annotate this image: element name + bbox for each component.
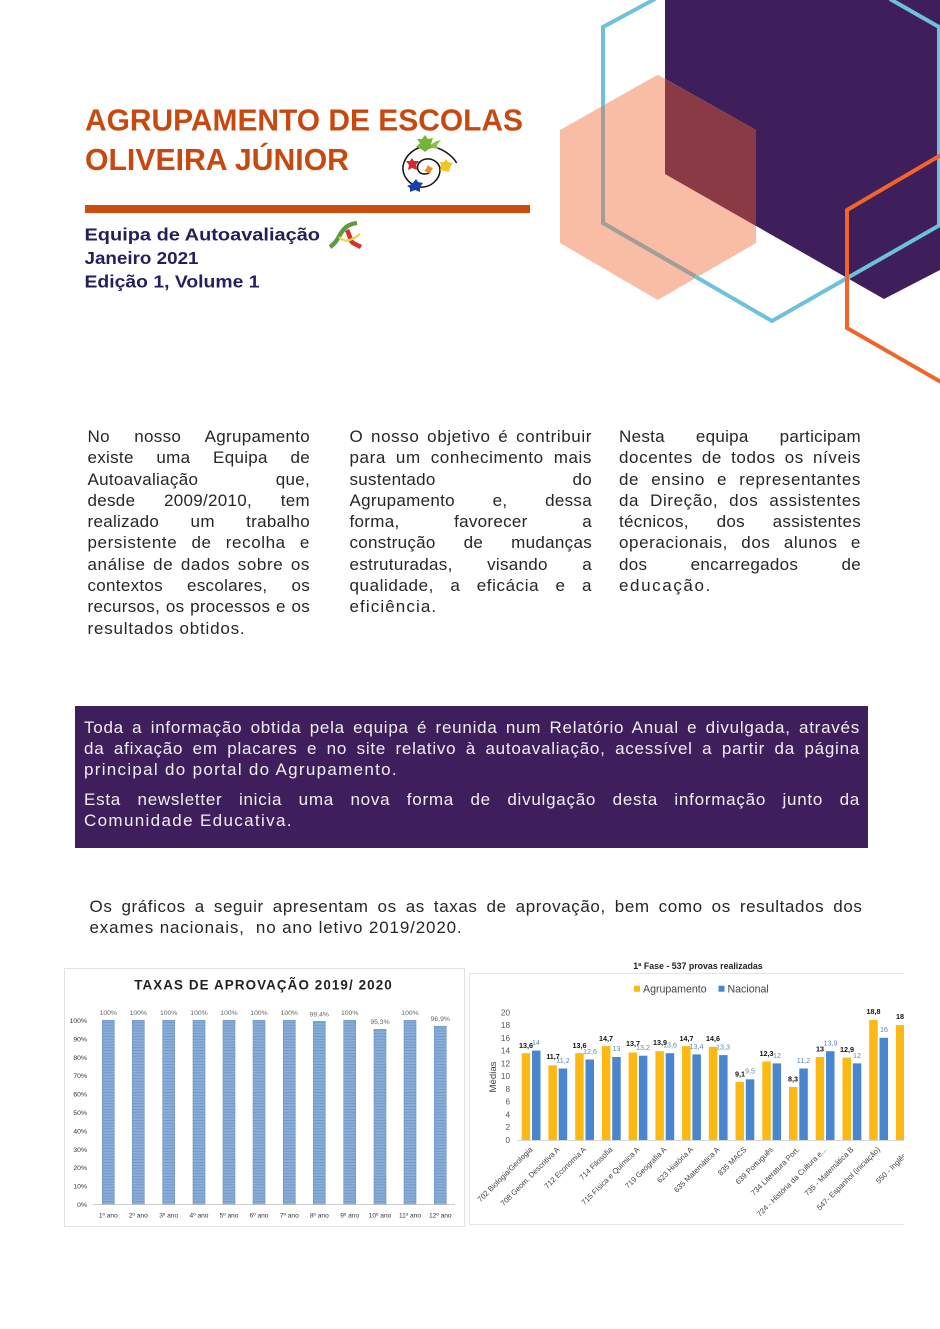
category labels: 712 Economia A: [542, 1144, 589, 1191]
value labels: 100%: [130, 1010, 147, 1017]
category labels: 547- Espanhol (iniciação): [815, 1145, 882, 1212]
y axis: 14: [501, 1047, 510, 1056]
values: Agrupamento: 8,3: [788, 1074, 798, 1084]
values: Agrupamento: 12,3: [760, 1049, 774, 1058]
text column 2: Agrupamento e, dessa: [350, 491, 592, 510]
hexagon outline: blue over peach: [603, 106, 695, 276]
x axis labels: 3º ano: [159, 1212, 178, 1220]
text column 3: [619, 427, 861, 595]
chart title: 1ª Fase - 537 provas realizadas: [633, 961, 763, 971]
hexagon outline: orange: [847, 155, 940, 382]
divider bar: [84, 204, 530, 213]
value labels: 99,4%: [310, 1012, 329, 1018]
callout banner: Comunidade Educativa.: [84, 811, 293, 830]
icon: school spiral logo: [402, 135, 458, 192]
callout banner: [75, 706, 868, 848]
y axis labels: 60%: [73, 1092, 87, 1099]
intro text for charts: [90, 897, 862, 937]
subtitle block: Equipa de Autoavaliação: [84, 225, 320, 245]
hexagon overlap: [665, 79, 756, 226]
values: Agrupamento: 18: [896, 1012, 904, 1021]
callout banner: Esta newsletter inicia uma nova forma de divulgação desta informação junto da: [84, 790, 860, 809]
text column 1: realizado um trabalho: [88, 512, 310, 531]
value labels: 95,3%: [370, 1019, 390, 1026]
values: Agrupamento: 13,7: [626, 1039, 640, 1048]
intro text for charts: exames nacionais, no ano letivo 2019/2020.: [90, 918, 463, 937]
values: Agrupamento: 11,7: [546, 1052, 560, 1061]
value labels: 100%: [100, 1010, 117, 1017]
graphic: decorative hexagons: [560, 0, 940, 384]
y axis: 8: [505, 1085, 510, 1094]
x axis labels: 8º ano: [310, 1212, 329, 1220]
values: Nacional: 13,2: [636, 1043, 650, 1052]
y axis labels: 50%: [73, 1110, 87, 1117]
value labels: 100%: [281, 1010, 298, 1017]
category labels: 735 - Matemática B: [802, 1145, 855, 1198]
callout banner: principal do portal do Agrupamento.: [84, 760, 398, 779]
text column 2: sustentado do: [350, 470, 592, 489]
hexagon outline: blue: [603, 0, 940, 321]
values: Agrupamento: 13: [816, 1044, 824, 1054]
values: Nacional: 13,6: [663, 1040, 677, 1050]
x axis labels: [99, 1212, 452, 1220]
hexagon: peach: [560, 75, 756, 300]
values: Nacional: 13,9: [824, 1038, 838, 1048]
x axis labels: 7º ano: [280, 1212, 299, 1220]
category labels: 714 Filosofia: [578, 1145, 615, 1182]
category labels: 835 MACS: [716, 1145, 748, 1177]
values: Nacional: 11,2: [556, 1056, 570, 1065]
text column 1: contextos escolares, os: [88, 576, 310, 595]
subtitle block: Janeiro 2021: [84, 248, 199, 268]
title: AGRUPAMENTO DE ESCOLAS: [85, 103, 523, 138]
y axis labels: 30%: [73, 1147, 87, 1154]
text column 1: existe uma Equipa de: [88, 448, 310, 467]
category labels: 635 Matemática A: [672, 1144, 722, 1194]
text column 1: desde 2009/2010, tem: [88, 491, 310, 510]
bars: Agrupamento: [522, 1020, 904, 1140]
callout banner: da afixação em placares e no site relativo à autoavaliação, acessível a partir da página: [84, 739, 860, 758]
text column 3: da Direção, dos assistentes: [619, 491, 861, 510]
text column 1: Autoavaliação que,: [88, 470, 310, 489]
x axis labels: 2º ano: [129, 1212, 148, 1220]
bar chart: national exam results: Médias: [488, 1061, 499, 1092]
values: Nacional: 16: [880, 1025, 888, 1034]
x axis labels: 4º ano: [190, 1212, 209, 1220]
text column 2: O nosso objetivo é contribuir: [350, 427, 592, 446]
category labels: 639 Português: [734, 1145, 775, 1186]
bars: Nacional: [532, 1038, 888, 1140]
x axis labels: 6º ano: [250, 1212, 269, 1220]
values: Nacional: 11,2: [797, 1056, 810, 1065]
x axis labels: 5º ano: [220, 1212, 239, 1220]
category labels: [476, 1144, 909, 1219]
legend: Nacional: [728, 984, 769, 996]
y axis: 18: [501, 1021, 510, 1030]
text column 1: persistente de recolha e: [88, 533, 310, 552]
y axis labels: 80%: [73, 1055, 87, 1062]
text column 3: de ensino e representantes: [619, 470, 861, 489]
category labels: 724 - História da Cultura e...: [755, 1145, 828, 1219]
y axis: 4: [505, 1110, 510, 1120]
x axis labels: 10º ano: [369, 1212, 392, 1220]
y axis: 12: [501, 1059, 510, 1068]
values: Agrupamento: 18,8: [866, 1007, 880, 1016]
values: Agrupamento: [519, 1007, 904, 1084]
text column 2: [350, 427, 592, 616]
y axis labels: 20%: [73, 1165, 87, 1172]
subtitle block: [84, 225, 320, 291]
legend: [634, 984, 768, 995]
value labels: 100%: [341, 1010, 358, 1017]
values: Agrupamento: 14,7: [680, 1034, 694, 1043]
text column 2: eficiência.: [350, 597, 437, 616]
title: [85, 103, 523, 177]
x axis labels: 9º ano: [340, 1212, 359, 1220]
category labels: 719 Geografia A: [623, 1144, 669, 1190]
values: Agrupamento: 13,6: [572, 1041, 586, 1050]
y axis: 2: [505, 1123, 510, 1132]
values: Nacional: [532, 1025, 888, 1076]
values: Agrupamento: 14,7: [599, 1034, 613, 1043]
y axis labels: 100%: [70, 1018, 87, 1025]
title: OLIVEIRA JÚNIOR: [85, 141, 349, 177]
text column 2: forma, favorecer a: [350, 512, 592, 531]
values: Agrupamento: 13,6: [519, 1041, 533, 1050]
category labels: 734 Literatura Port.: [749, 1145, 801, 1197]
text column 3: Nesta equipa participam: [619, 427, 861, 446]
values: Nacional: 13: [612, 1044, 620, 1053]
value labels: 100%: [220, 1010, 238, 1017]
value labels: [100, 1010, 450, 1026]
y axis: 0: [505, 1136, 510, 1145]
value labels: 100%: [160, 1010, 177, 1017]
values: Nacional: 12: [773, 1051, 781, 1060]
text column 1: análise de dados sobre os: [88, 555, 310, 574]
y axis: 20: [501, 1008, 510, 1017]
values: Nacional: 9,5: [745, 1066, 755, 1076]
values: Nacional: 12,6: [583, 1047, 597, 1056]
y axis labels: [70, 1018, 87, 1209]
y axis: [501, 1008, 510, 1145]
y axis labels: 10%: [73, 1184, 87, 1191]
text column 2: construção de mudanças: [350, 533, 592, 552]
text column 3: educação.: [619, 576, 712, 595]
intro text for charts: Os gráficos a seguir apresentam os as taxas de aprovação, bem como os resultados dos: [90, 897, 862, 916]
category labels: 702 Biologia/Geologia: [476, 1145, 535, 1204]
y axis: 16: [501, 1034, 510, 1043]
text column 1: recursos, os processos e os: [88, 597, 310, 616]
text column 3: docentes de todos os níveis: [619, 448, 861, 467]
legend: Agrupamento: [643, 984, 707, 996]
text column 2: qualidade, a eficácia e a: [350, 576, 592, 595]
value labels: 96,9%: [431, 1016, 450, 1023]
category labels: 715 Física e Química A: [580, 1144, 642, 1207]
bar chart: national exam results: [469, 962, 904, 1225]
category labels: 708 Geom. Descritiva A: [499, 1144, 562, 1208]
x axis labels: 11º ano: [399, 1212, 421, 1220]
values: Agrupamento: 9,1: [735, 1070, 745, 1078]
values: Agrupamento: 13,9: [653, 1038, 667, 1047]
text column 1: [88, 427, 310, 638]
text column 2: para um conhecimento mais: [350, 448, 592, 467]
bars: [102, 1020, 446, 1204]
text column 3: técnicos, dos assistentes: [619, 512, 861, 531]
icon: self-assessment team logo: [328, 220, 362, 249]
chart title: TAXAS DE APROVAÇÃO 2019/ 2020: [134, 978, 393, 992]
y axis labels: 40%: [73, 1128, 87, 1135]
callout banner: Toda a informação obtida pela equipa é reunida num Relatório Anual e divulgada, através: [84, 718, 860, 736]
y axis labels: 0%: [77, 1202, 87, 1209]
category labels: 550 - Inglês: [874, 1151, 909, 1185]
text column 3: dos encarregados de: [619, 555, 861, 574]
value labels: 100%: [401, 1010, 419, 1017]
text column 2: estruturadas, visando a: [350, 555, 592, 574]
x axis labels: 1º ano: [99, 1212, 118, 1220]
values: Nacional: 12: [853, 1051, 861, 1060]
y axis: 10: [501, 1072, 510, 1081]
y axis labels: 90%: [73, 1036, 87, 1043]
text column 1: resultados obtidos.: [88, 619, 245, 638]
values: Nacional: 13,3: [716, 1042, 730, 1052]
y axis: 6: [505, 1098, 510, 1107]
values: Nacional: 14: [532, 1038, 540, 1047]
values: Agrupamento: 12,9: [840, 1045, 854, 1054]
y axis labels: 70%: [73, 1073, 87, 1080]
value labels: 100%: [250, 1010, 268, 1017]
value labels: 100%: [190, 1010, 208, 1017]
values: Agrupamento: 14,6: [706, 1034, 720, 1043]
subtitle block: Edição 1, Volume 1: [84, 271, 260, 291]
x axis labels: 12º ano: [429, 1212, 452, 1220]
text column 1: No nosso Agrupamento: [88, 427, 310, 446]
category labels: 623 História A: [655, 1144, 696, 1185]
text column 3: operacionais, dos alunos e: [619, 533, 861, 552]
hexagon: purple: [665, 0, 940, 299]
hexagon outline: blue top right: [890, 0, 939, 225]
values: Nacional: 13,4: [690, 1042, 704, 1051]
